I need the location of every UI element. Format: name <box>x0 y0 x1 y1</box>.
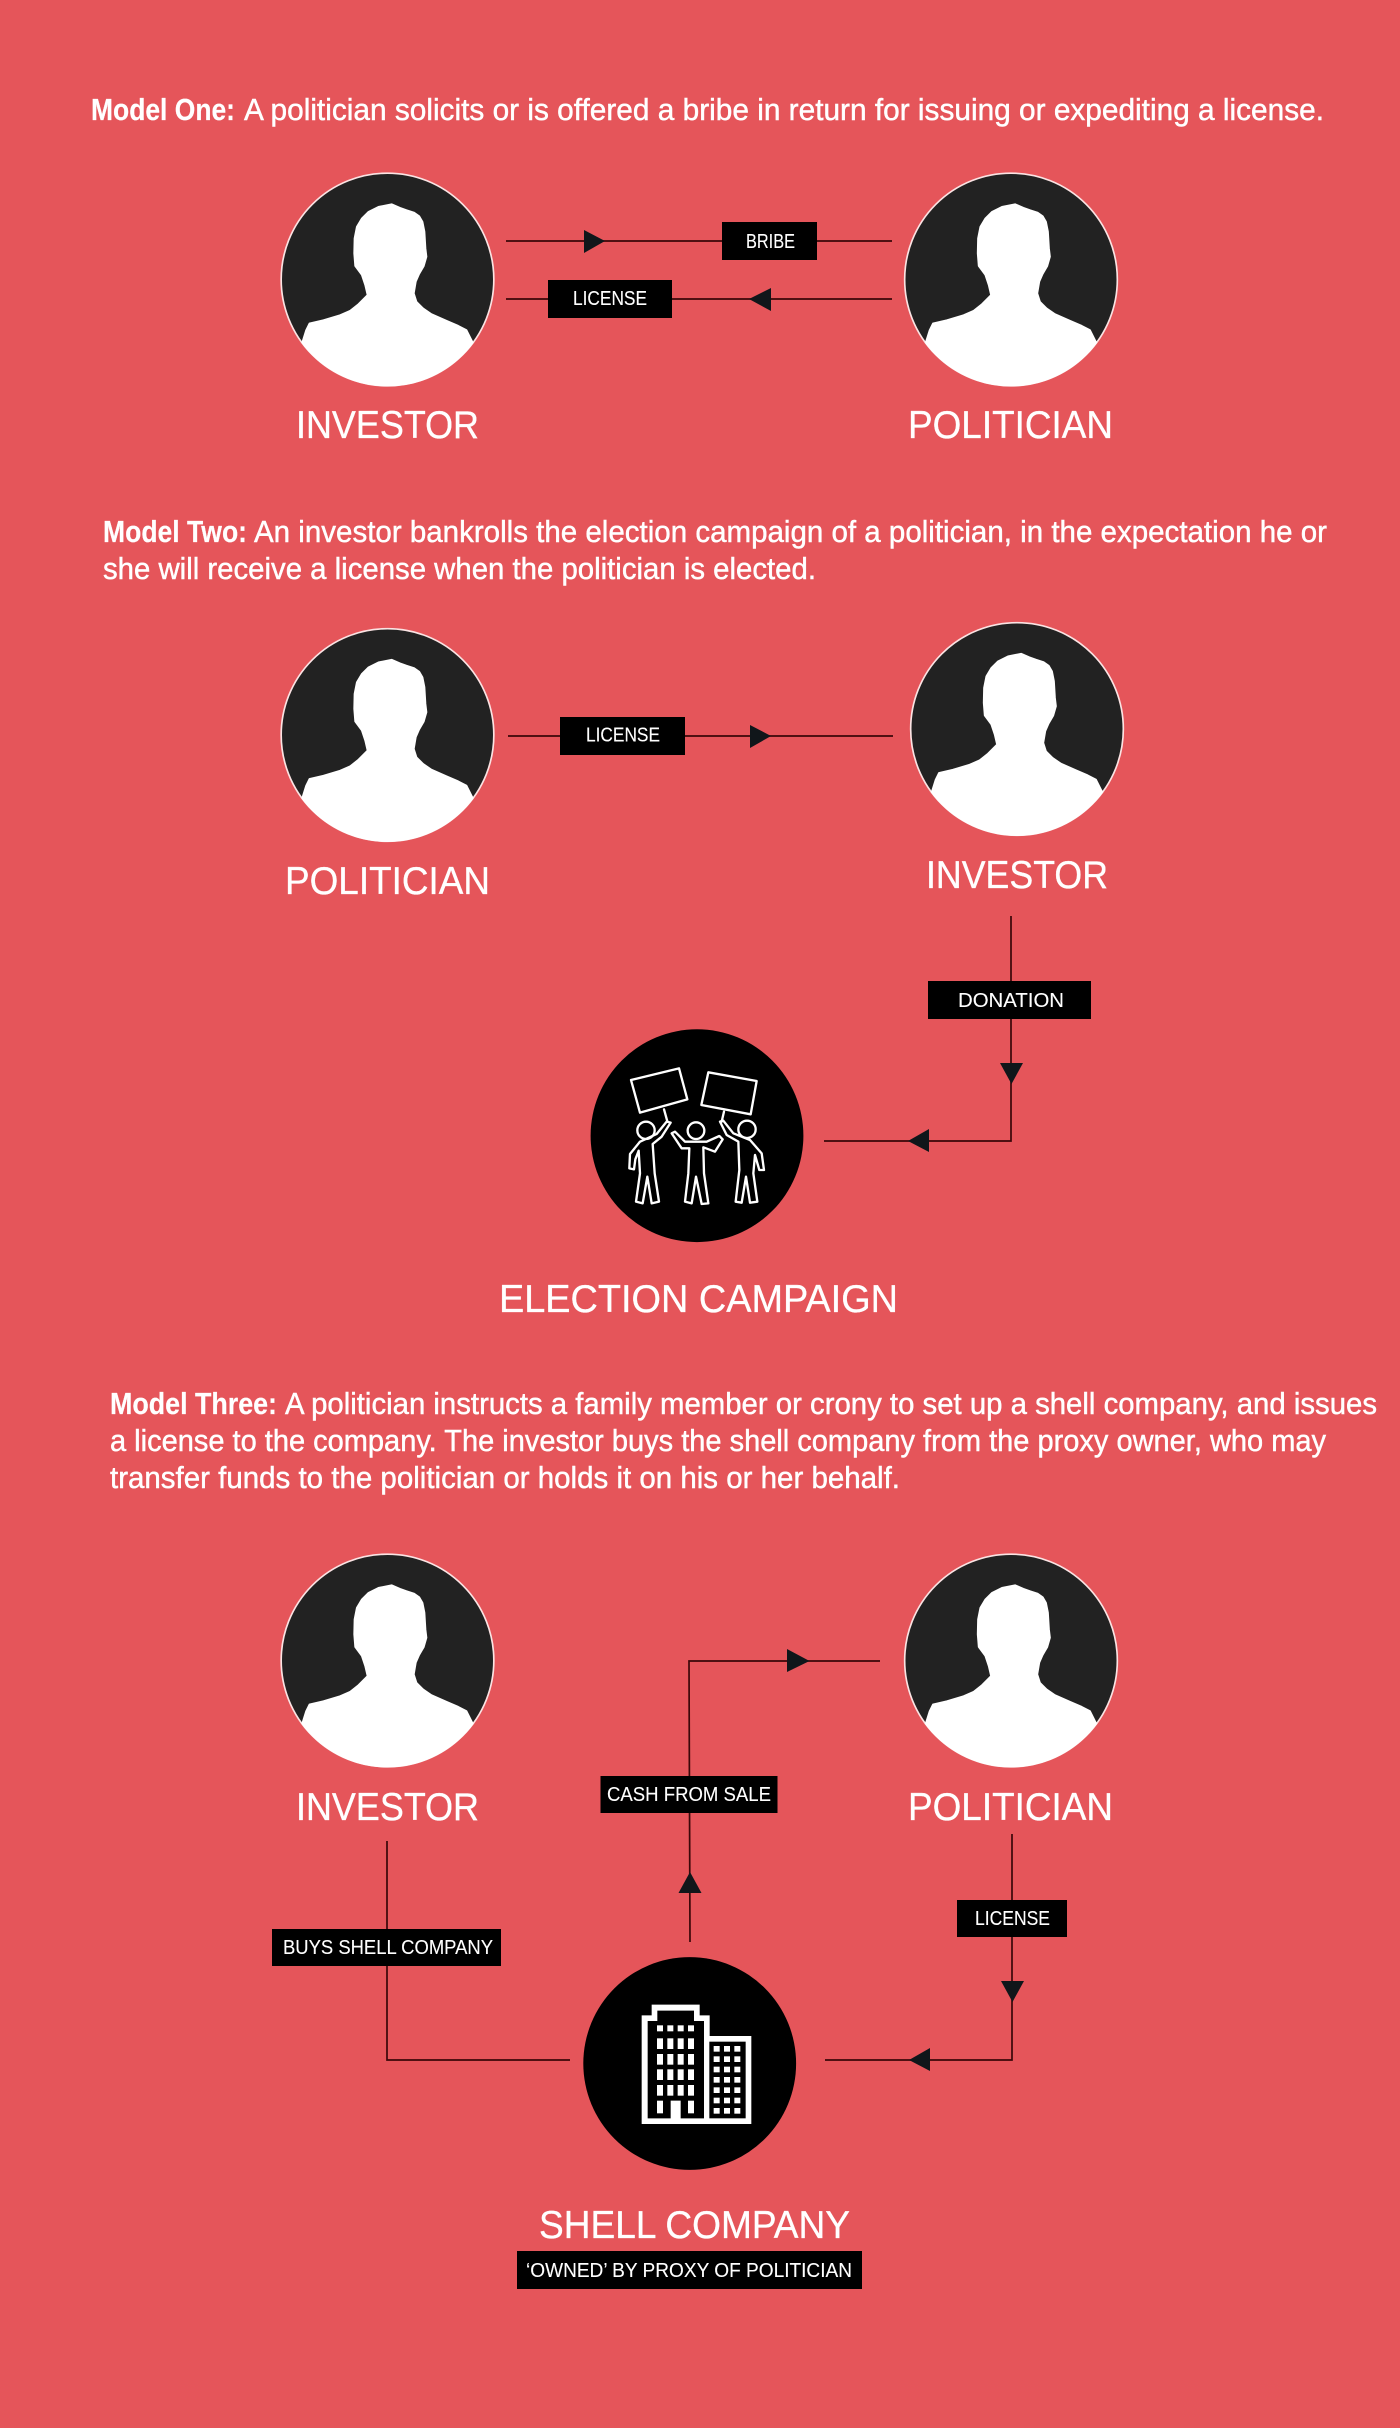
arrow: license flow: LICENSE <box>573 288 647 310</box>
arrow: bribe flow <box>506 222 892 260</box>
icon: shell company building <box>583 1957 796 2170</box>
callout: owned by proxy of politician <box>517 2251 862 2289</box>
icon: investor avatar <box>281 173 494 386</box>
arrow: buys shell company flow: BUYS SHELL COMPANY <box>283 1937 493 1959</box>
label: election campaign: ELECTION CAMPAIGN <box>499 1278 898 1321</box>
arrow: cash from sale flow: CASH FROM SALE <box>607 1784 771 1806</box>
panel: model two <box>103 514 1327 1321</box>
arrow: license flow: LICENSE <box>586 724 660 746</box>
text: model two description: she will receive a license when the politician is elected. <box>103 551 816 586</box>
text: model two description: Model Two: <box>103 514 247 549</box>
arrow: cash from sale flow <box>600 1649 880 1942</box>
arrow: donation flow <box>824 916 1091 1152</box>
panel: model three <box>110 1386 1377 2289</box>
callout: owned by proxy of politician: ‘OWNED’ BY PROXY OF POLITICIAN <box>526 2260 852 2282</box>
icon: politician avatar <box>905 173 1117 386</box>
arrow: license flow <box>506 280 892 318</box>
text: model three description: Model Three: <box>110 1386 277 1421</box>
arrow: license flow: LICENSE <box>975 1908 1050 1930</box>
arrow: buys shell company flow <box>272 1841 570 2060</box>
arrow: license flow <box>825 1834 1067 2071</box>
arrow: license flow <box>508 717 893 755</box>
text: model three description: transfer funds to the politician or holds it on his or her behalf. <box>110 1460 900 1495</box>
label: investor: INVESTOR <box>296 404 479 447</box>
label: politician: POLITICIAN <box>908 1786 1113 1829</box>
label: shell company: SHELL COMPANY <box>539 2204 850 2247</box>
text: model one description: Model One: <box>91 92 235 127</box>
text: model two description <box>103 514 1327 586</box>
arrow: donation flow: DONATION <box>958 990 1064 1012</box>
text: model two description: An investor bankrolls the election campaign of a politician, in the expectation he or <box>254 514 1327 549</box>
text: model one description: A politician solicits or is offered a bribe in return for issuing or expediting a license. <box>244 92 1324 127</box>
label: politician: POLITICIAN <box>908 404 1113 447</box>
label: investor: INVESTOR <box>926 854 1108 897</box>
icon: investor avatar <box>911 623 1123 835</box>
icon: politician avatar <box>281 629 494 841</box>
arrow: bribe flow: BRIBE <box>746 231 795 253</box>
text: model three description: a license to the company. The investor buys the shell company from the proxy owner, who may <box>110 1423 1326 1458</box>
icon: investor avatar <box>281 1554 494 1767</box>
label: investor: INVESTOR <box>296 1786 479 1829</box>
icon: election campaign protesters <box>591 1029 803 1242</box>
icon: politician avatar <box>905 1554 1117 1767</box>
panel: model one <box>91 92 1324 447</box>
text: model three description <box>110 1386 1377 1495</box>
label: politician: POLITICIAN <box>285 860 490 903</box>
